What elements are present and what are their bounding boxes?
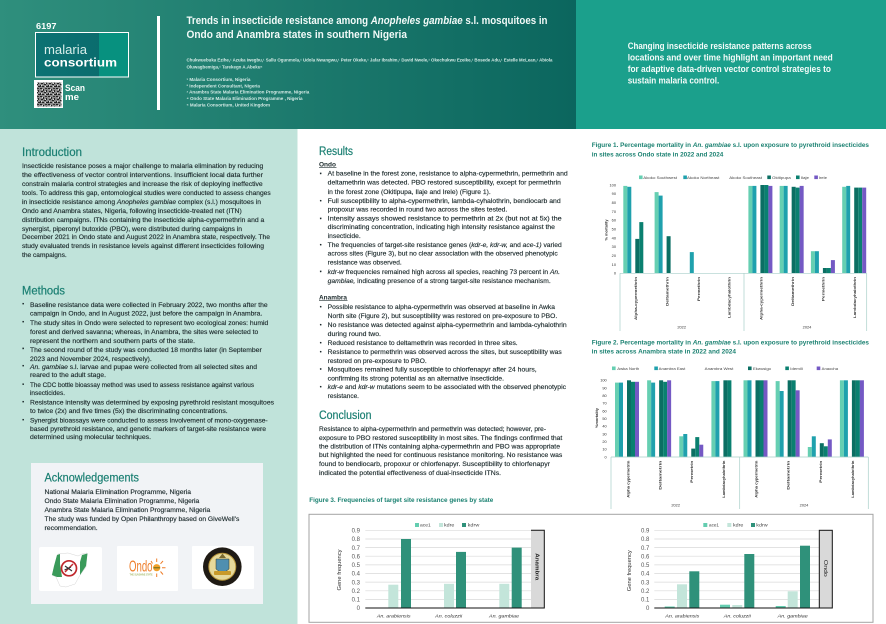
results: Ondo bullets: across sites (Figure 3), but no clear association with the observed phenotypic bbox=[328, 250, 558, 258]
Ondo species labels: An. coluzzii bbox=[723, 614, 752, 620]
introduction text: Ondo and Anambra states, Nigeria, following insecticide-treated net (ITN) bbox=[22, 208, 242, 215]
figure 1 legend: Irele bbox=[819, 175, 827, 180]
figure 1 title: Figure 1. Percentage mortality in An. gambiae s.l. upon exposure to pyrethroid insecticides bbox=[592, 142, 869, 149]
results: Anambra bullets: restored on pre-exposure to PBO. bbox=[328, 358, 427, 365]
Ondo y axis: 0.7 bbox=[641, 546, 650, 552]
title: Trends in insecticide resistance among Anopheles gambiae s.l. mosquitoes in bbox=[186, 15, 548, 27]
introduction text: distribution campaigns. ITNs containing the insecticide alpha-cypermethrin and a bbox=[22, 217, 265, 224]
conclusion text: found to bendiocarb, propoxur or chlorfenapyr. Susceptibility to chlorfenapyr bbox=[319, 461, 550, 468]
Anambra species labels bbox=[376, 614, 519, 620]
results: Ondo bullets: gambiae, indicating presence of a strong target-site resistance mechanism. bbox=[328, 278, 551, 285]
Ondo y axis: 0.9 bbox=[641, 528, 650, 534]
QR code bbox=[34, 80, 63, 108]
figure 1 category labels: Alpha-cypermethrin bbox=[759, 276, 764, 320]
Ondo y axis: 0.6 bbox=[641, 554, 650, 560]
figure 2 year labels: 2022 bbox=[671, 503, 680, 508]
results: Ondo bullets: At baseline in the forest zone, resistance to alpha-cypermethrin, permethrin and bbox=[328, 170, 568, 178]
Ondo y axis bbox=[641, 528, 650, 612]
Ondo species labels: An. gambiae bbox=[777, 614, 808, 620]
Anambra species labels: An. arabiensis bbox=[376, 614, 411, 620]
Anambra y axis: 0.4 bbox=[352, 572, 361, 578]
conclusion text: indicated the potential effectiveness of dual-insecticide ITNs. bbox=[319, 470, 501, 477]
figure 2 y axis: 70 bbox=[602, 401, 608, 406]
results: Ondo bullets: insecticide. bbox=[328, 233, 361, 240]
methods bullets: to twice (2x) and five times (5x) the discriminating concentrations. bbox=[30, 408, 228, 415]
results: Anambra bullets: Reduced resistance to deltamethrin was recorded in three sites. bbox=[328, 340, 518, 347]
Ondo y axis: 0.1 bbox=[641, 598, 650, 604]
scan me label: Scan bbox=[65, 83, 85, 93]
figure 2 y axis: 20 bbox=[602, 439, 608, 444]
figure 2 legend: Awka North bbox=[617, 366, 639, 371]
Ondo legend: kdrw bbox=[756, 523, 768, 528]
key message panel: for adaptive data-driven vector control strategies to bbox=[628, 64, 831, 74]
Anambra species labels: An. gambiae bbox=[488, 614, 519, 620]
figure 2 title: in sites across Anambra state in 2022 and 2024 bbox=[592, 349, 736, 356]
Anambra species labels: An. coluzzii bbox=[434, 614, 463, 620]
methods bullets: based pyrethroid resistance, and genetic markers of target-site resistance were bbox=[30, 426, 267, 433]
introduction heading: Introduction bbox=[22, 147, 82, 159]
figure 1 y axis: 20 bbox=[612, 253, 617, 258]
results: Anambra bullets: kdr-e and kdr-w mutations seem to be associated with the observed phenotypic bbox=[328, 384, 566, 391]
Anambra y axis: 0.5 bbox=[352, 563, 361, 569]
figure 1 year labels: 2024 bbox=[803, 324, 812, 330]
figure 1 category labels: Lambdacyhalothrin bbox=[852, 276, 857, 318]
affiliations: ² Independent Consultant, Nigeria bbox=[186, 84, 261, 88]
figure 2 chart bbox=[594, 366, 868, 509]
Anambra y axis: 0.1 bbox=[352, 598, 361, 604]
acknowledgements text: recommendation. bbox=[44, 525, 98, 532]
figure 2 legend: Idemili bbox=[790, 366, 803, 371]
figure 1 category labels: Alpha-cypermethrin bbox=[633, 276, 638, 320]
results: Ondo bullets: propoxur was recorded in round two across the sites tested. bbox=[328, 207, 508, 214]
figure 1 chart bbox=[603, 175, 867, 331]
methods bullets: represent the northern and southern parts of the state. bbox=[30, 338, 195, 345]
methods bullets: Resistance intensity was determined by exposing pyrethroid resistant mosquitoes bbox=[30, 399, 274, 406]
acknowledgements text: National Malaria Elimination Programme, Nigeria bbox=[44, 489, 192, 496]
results: Ondo subheading: Ondo bbox=[319, 161, 336, 168]
results: Anambra bullets: confirming its strong potential as an alternative insecticide. bbox=[328, 375, 504, 382]
figure 1 category labels: Permethrin bbox=[696, 276, 701, 301]
Anambra legend bbox=[415, 523, 480, 528]
logo: Ondo state: THE SUNSHINE STATE bbox=[130, 574, 153, 576]
figure 1 y axis bbox=[610, 182, 617, 276]
methods bullets: The study sites in Ondo were selected to represent two ecological zones: humid bbox=[30, 320, 268, 327]
figure 1 y axis: 60 bbox=[612, 218, 617, 223]
Anambra state strip bbox=[365, 530, 544, 608]
figure 2 legend bbox=[612, 366, 839, 371]
scan me label bbox=[65, 83, 85, 102]
figure 2 title bbox=[592, 339, 869, 356]
acknowledgements panel bbox=[31, 463, 263, 604]
results: Ondo bullets: discriminating concentration, indicating high intensity resistance against the bbox=[328, 224, 556, 231]
figure 1 bars bbox=[623, 185, 866, 273]
results: Ondo bullets: kdr-w frequencies remained high across all species, reaching 73 percent in An. bbox=[328, 269, 560, 276]
methods heading: Methods bbox=[22, 286, 65, 298]
figure 2 category labels bbox=[626, 460, 855, 498]
results: Anambra bullets: Resistance to permethrin was observed across the sites, but susceptibility was bbox=[328, 349, 562, 356]
figure 2 chart: %mortality bbox=[594, 407, 599, 428]
results: Ondo bullets: in the forest zone (Okitipupa, Ilaje and Irele) (Figure 1). bbox=[328, 189, 491, 196]
Ondo y axis: 0.5 bbox=[641, 563, 650, 569]
figure 3 title: Figure 3. Frequencies of target site resistance genes by state bbox=[309, 497, 494, 504]
results: Anambra bullets: North site (Figure 2), but susceptibility was restored on pre-exposure to PBO. bbox=[328, 313, 558, 320]
methods bullets: insecticides. bbox=[30, 390, 65, 397]
key message panel: Changing insecticide resistance patterns across bbox=[628, 41, 812, 51]
Ondo y axis: 0.3 bbox=[641, 580, 650, 586]
chart: Anambra gene frequencies bbox=[337, 523, 544, 620]
chart: Ondo gene frequencies bbox=[627, 523, 832, 620]
figure 2 year labels bbox=[671, 503, 809, 508]
Anambra state strip: Anambra bbox=[534, 553, 540, 580]
Ondo y axis: 0.2 bbox=[641, 589, 650, 595]
Anambra legend: kdrw bbox=[468, 523, 480, 528]
results: Ondo bullets bbox=[320, 170, 568, 285]
figure 2 y axis: 80 bbox=[602, 393, 608, 398]
Ondo legend: ace1 bbox=[709, 523, 719, 528]
figure 2 y axis: 0 bbox=[605, 454, 608, 459]
figure 1 legend: Akoko Northeast bbox=[687, 175, 720, 180]
methods bullets: determined using molecular techniques. bbox=[30, 434, 151, 441]
Ondo state strip bbox=[654, 530, 832, 608]
Ondo legend: kdre bbox=[733, 523, 744, 528]
poster number: 6197 bbox=[36, 21, 57, 31]
affiliations: ⁵ Malaria Consortium, United Kingdom bbox=[186, 102, 270, 108]
figure 1 y axis: 50 bbox=[612, 226, 617, 232]
figure 2 legend: Anambra West bbox=[705, 366, 734, 371]
figure 1 category labels bbox=[633, 276, 857, 320]
figure 2 category labels: Permetrin bbox=[818, 460, 823, 483]
Anambra y axis: 0.8 bbox=[352, 537, 361, 543]
conclusion text: Resistance to alpha-cypermethrin and permethrin was detected; however, pre- bbox=[319, 426, 546, 433]
figure 1 category labels: Permethrin bbox=[821, 276, 826, 301]
conclusion text bbox=[319, 426, 563, 477]
figure 2 category labels: Permetrin bbox=[689, 460, 694, 483]
introduction text bbox=[22, 163, 271, 259]
title: Ondo and Anambra states in southern Nigeria bbox=[186, 29, 407, 41]
results: Anambra bullets bbox=[320, 304, 567, 400]
figure 1 chart: % mortality bbox=[603, 219, 608, 240]
Anambra y axis: 0.6 bbox=[352, 554, 361, 560]
introduction text: synergist, piperonyl butoxide (PBO), were distributed during campaigns in bbox=[22, 226, 242, 233]
chart: Anambra gene frequencies: Gene frequency bbox=[337, 549, 343, 590]
results: Ondo bullets: The frequencies of target-site resistance genes ( kdr-e, kdr-w, and ace-1) varied bbox=[328, 242, 562, 249]
affiliations: ⁴ Ondo State Malaria Elimination Programme , Nigeria bbox=[186, 96, 303, 101]
results: Anambra bullets: resistance. bbox=[328, 393, 359, 400]
figure 1 legend: Akoko Southwest bbox=[643, 175, 678, 180]
figure 2 legend: Ekwusigo bbox=[753, 366, 771, 371]
methods bullets: The CDC bottle bioassay method was used to assess resistance against various bbox=[30, 382, 254, 389]
methods bullets: Baseline resistance data were collected in February 2022, two months after the bbox=[30, 302, 268, 309]
key message panel: sustain malaria control. bbox=[628, 75, 719, 85]
figure 3 panel bbox=[309, 514, 873, 622]
Anambra y axis: 0.9 bbox=[352, 528, 361, 534]
figure 1 year labels bbox=[677, 324, 812, 330]
figure 2 bars bbox=[615, 380, 864, 457]
acknowledgements text bbox=[44, 489, 239, 532]
conclusion heading: Conclusion bbox=[319, 410, 372, 422]
affiliations: ³ Anambra State Malaria Elimination Programme, Nigeria bbox=[186, 90, 310, 95]
figure 1 y axis: 10 bbox=[612, 262, 617, 267]
figure 1 y axis: 40 bbox=[612, 235, 617, 240]
results: Ondo bullets: deltamethrin was detected. PBO restored susceptibility, except for permethrin bbox=[328, 180, 561, 186]
conclusion text: exposure to PBO restored susceptibility in most sites. The findings confirmed that bbox=[319, 435, 563, 442]
logo: Ondo state: Ondo bbox=[129, 558, 152, 576]
chart: Ondo gene frequencies: Gene frequency bbox=[627, 550, 633, 591]
Ondo legend bbox=[703, 523, 768, 528]
results: Ondo bullets: resistance was observed. bbox=[328, 260, 402, 266]
logo: malaria consortium: consortium bbox=[44, 56, 117, 70]
Ondo bars bbox=[665, 546, 810, 608]
results: Anambra subheading: Anambra bbox=[319, 294, 348, 301]
figure 2 y axis bbox=[600, 378, 608, 459]
results: Anambra bullets: during round two. bbox=[328, 331, 381, 338]
methods bullets: forest and derived savanna; whereas, in Anambra, the sites were selected to bbox=[30, 329, 259, 336]
acknowledgements heading: Acknowledgements bbox=[44, 473, 139, 485]
results: Anambra bullets: Mosquitoes remained fully susceptible to chlorfenapyr after 24 hours, bbox=[328, 366, 537, 373]
figure 1 legend: Akoko Southeast bbox=[729, 175, 763, 180]
methods bullets: 2023 and November 2024, respectively). bbox=[30, 356, 152, 363]
figure 1 category labels: Deltamethrin bbox=[790, 276, 795, 306]
figure 1 y axis: 90 bbox=[612, 191, 617, 196]
figure 1 year labels: 2022 bbox=[677, 324, 686, 330]
figure 1 title: in sites across Ondo state in 2022 and 2024 bbox=[592, 151, 724, 158]
Ondo state strip: Ondo bbox=[822, 560, 828, 577]
logo: malaria consortium bbox=[36, 32, 128, 77]
conclusion text: but highlighted the need for continuous resistance monitoring. No resistance was bbox=[319, 452, 562, 459]
methods bullets: reared to the adult stage. bbox=[30, 372, 106, 379]
introduction text: constrain malaria control strategies and increase the risk of deploying ineffective bbox=[22, 181, 263, 188]
methods bullets: campaign in Ondo, and in August 2022, just before the campaign in Anambra. bbox=[30, 310, 263, 318]
introduction text: the campaigns. bbox=[22, 252, 67, 259]
introduction text: study evaluated trends in resistance levels against different insecticides following bbox=[22, 243, 264, 250]
introduction text: the effectiveness of vector control interventions. Insufficient local data further bbox=[22, 172, 263, 179]
Anambra bars bbox=[388, 539, 522, 608]
figure 2 category labels: Lambdacyhalothrin bbox=[850, 460, 855, 498]
figure 2 category labels: Deltametrin bbox=[658, 460, 663, 490]
conclusion text: the distribution of ITNs containing alpha-cypermethrin and PBO was appropriate bbox=[319, 443, 561, 450]
title bbox=[186, 15, 548, 41]
Anambra y axis: 0 bbox=[357, 606, 361, 612]
Anambra y axis: 0.7 bbox=[352, 546, 361, 552]
figure 1 legend: Okitipupa bbox=[772, 175, 792, 180]
figure 2 y axis: 100 bbox=[600, 378, 608, 383]
Ondo species labels bbox=[664, 614, 808, 620]
figure 1 y axis: 70 bbox=[612, 209, 617, 214]
methods bullets: Synergist bioassays were conducted to assess involvement of mono-oxygenase- bbox=[30, 417, 268, 424]
figure 1 legend bbox=[639, 175, 827, 180]
authors bbox=[186, 58, 553, 70]
acknowledgements text: The study was funded by Open Philanthropy based on GiveWell's bbox=[44, 516, 239, 523]
results: Anambra bullets: No resistance was detected against alpha-cypermethrin and lambda-cyhalothrin bbox=[328, 322, 567, 329]
Anambra legend: ace1 bbox=[420, 523, 431, 528]
header banner bbox=[0, 0, 576, 129]
scan me label: me bbox=[65, 92, 79, 102]
figure 2 year labels: 2024 bbox=[800, 503, 809, 508]
methods bullets: An. gambiae s.l. larvae and pupae were collected from all selected sites and bbox=[29, 364, 257, 371]
figure 2 y axis: 10 bbox=[602, 447, 608, 452]
results: Anambra bullets: Possible resistance to alpha-cypermethrin was observed at baseline in Awka bbox=[328, 304, 556, 311]
affiliations bbox=[186, 77, 310, 108]
acknowledgements text: Ondo State Malaria Elimination Programme, Nigeria bbox=[44, 498, 200, 505]
logo: malaria consortium: malaria bbox=[44, 42, 88, 57]
figure 2 title: Figure 2. Percentage mortality in An. gambiae s.l. upon exposure to pyrethroid insecticides bbox=[592, 339, 869, 346]
figure 2 y axis: 60 bbox=[602, 408, 608, 413]
figure 2 category labels: Alpha cypermetrin bbox=[626, 460, 631, 498]
methods bullets: The second round of the study was conducted 18 months later (in September bbox=[30, 347, 262, 354]
figure 1 y axis: 100 bbox=[610, 182, 617, 187]
figure 1 legend: Ilaje bbox=[801, 175, 809, 180]
introduction text: tools. To address this gap, entomological studies were conducted to assess changes bbox=[22, 190, 271, 197]
introduction text: Insecticide resistance poses a major challenge to malaria elimination by reducing bbox=[22, 163, 263, 170]
authors: Chukwuebuka Ezihe,¹ Azuka Iwegbu,¹ Sallu Ogunmola,¹ Udola Nwangwu,¹ Peter Okeke,¹ Jafar Ibrahim,¹ David Nwele,¹ Okechukwu Ezeike,¹ Bosede Adu,¹ Estelle McLean,¹ Abiola bbox=[186, 58, 553, 62]
figure 2 y axis: 30 bbox=[602, 431, 608, 436]
logo: Anambra state seal bbox=[192, 546, 254, 589]
figure 1 y axis: 0 bbox=[614, 271, 617, 276]
authors: Oluwagbemiga,¹ Tarekegn A.Abeku⁵ bbox=[186, 64, 262, 70]
figure 2 category labels: Alpha cypermetrin bbox=[753, 460, 758, 498]
Anambra y axis: 0.3 bbox=[352, 580, 361, 586]
results: Ondo bullets: Intensity assays showed resistance to permethrin at 2x (but not at 5x) the bbox=[328, 216, 562, 222]
introduction text: December 2021 in Ondo state and August 2022 in Anambra state, respectively. The bbox=[22, 234, 271, 241]
figure 1 category labels: Deltamethrin bbox=[665, 276, 670, 306]
left column panel bbox=[0, 129, 298, 624]
figure 2 category labels: Lambdacyhalothrin bbox=[721, 460, 726, 498]
Anambra legend: kdre bbox=[444, 523, 455, 528]
Ondo species labels: An. arabiensis bbox=[664, 614, 700, 620]
Ondo y axis: 0.4 bbox=[641, 572, 650, 578]
results: Ondo bullets: Full susceptibility to alpha-cypermethrin, lambda-cyhalothrin, bendiocarb and bbox=[328, 198, 561, 205]
figure 2 category labels: Deltametrin bbox=[785, 460, 790, 490]
key message panel bbox=[576, 0, 886, 129]
figure 1 title bbox=[592, 142, 869, 158]
affiliations: ¹ Malaria Consortium, Nigeria bbox=[186, 77, 251, 82]
results heading: Results bbox=[319, 146, 353, 158]
figure 2 legend: Anaocha bbox=[822, 366, 839, 371]
introduction text: in insecticide resistance among Anopheles gambiae complex (s.l.) mosquitoes in bbox=[22, 199, 261, 206]
acknowledgements text: Anambra State Malaria Elimination Programme, Nigeria bbox=[44, 507, 211, 514]
figure 1 y axis: 30 bbox=[612, 244, 617, 249]
figure 2 y axis: 40 bbox=[602, 424, 608, 429]
figure 2 legend: Anambra East bbox=[659, 366, 686, 371]
figure 2 y axis: 50 bbox=[602, 416, 608, 421]
key message panel: locations and over time highlight an important need bbox=[628, 53, 833, 63]
figure 1 category labels: Lambdacyhalothrin bbox=[727, 276, 732, 318]
Ondo y axis: 0 bbox=[646, 606, 650, 612]
Anambra y axis: 0.2 bbox=[352, 589, 361, 595]
Anambra y axis bbox=[352, 528, 361, 612]
logo: Ondo state bbox=[117, 546, 178, 591]
figure 1 y axis: 80 bbox=[612, 200, 617, 205]
Ondo y axis: 0.8 bbox=[641, 537, 650, 543]
methods bullets bbox=[22, 302, 274, 441]
figure 2 y axis: 90 bbox=[602, 385, 608, 390]
logo: national malaria elimination programme bbox=[39, 547, 102, 591]
